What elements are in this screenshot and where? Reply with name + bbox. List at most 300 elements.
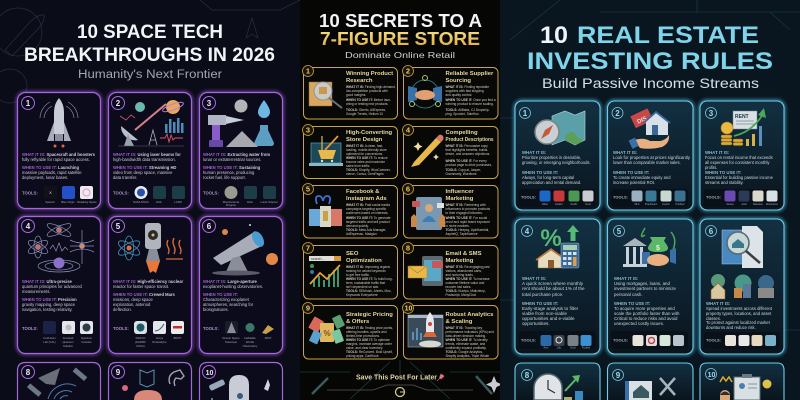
- card 2: lower than comparable market sales.: [613, 160, 681, 165]
- card 5: WHEN TO USE IT: Crewed Mars: [113, 292, 176, 297]
- card 3: Focus on rental income that exceeds: [705, 155, 773, 160]
- card 10: confidently expand profitably.: [446, 346, 487, 350]
- card 5: scale the portfolio faster than with: [614, 311, 680, 316]
- card 1: ching or testing new products.: [346, 102, 388, 106]
- icon: laser communications: [118, 100, 184, 146]
- card 3: WHAT IT IS: Extracting water from: [203, 152, 270, 157]
- card 3: rocket fuel, life support.: [203, 175, 246, 180]
- card 4: quantum principles for advanced: [22, 284, 83, 289]
- card 6: 6: [406, 184, 410, 194]
- logo badge: [327, 385, 473, 396]
- card 1: Prioritize properties in desirable,: [522, 155, 581, 160]
- card 3: all expenses for consistent monthly: [705, 160, 770, 165]
- card 2: TOOLS: AliBaba, CJ Dropship-: [446, 108, 490, 112]
- card 5: [108, 216, 192, 354]
- card 1: X: [49, 190, 52, 195]
- card 8: Postscript, ManyChat: [446, 293, 476, 297]
- card 4: Compelling: [446, 130, 478, 136]
- card 3: streams and stability.: [705, 180, 744, 185]
- card 9: [608, 363, 693, 400]
- card 1: 1: [306, 66, 310, 76]
- title: 10 SECRETS TO A: [319, 11, 482, 31]
- card 3: TOOLS:: [203, 190, 219, 196]
- card 1: WHAT IT IS: Finding high-demand,: [346, 85, 396, 89]
- card 3: Baselane: [753, 204, 764, 206]
- card 6: Influencer: [446, 189, 474, 195]
- card 8: 8: [525, 371, 530, 380]
- card 3: profits.: [705, 165, 717, 170]
- card 8: [18, 362, 100, 400]
- icon: tenant screening clipboard: [720, 374, 772, 400]
- card 4: opportunities and e-viable: [522, 316, 575, 321]
- card 6: WHAT IT IS: Large-aperture: [203, 279, 257, 284]
- card 8: 8: [406, 244, 410, 252]
- card 6: [200, 216, 282, 354]
- icon: due diligence and diversification: [711, 226, 774, 299]
- card 1: massive payloads, rapid satellite: [22, 170, 82, 175]
- card 4: desire, and answers objections.: [446, 152, 490, 156]
- card 4: TOOLS: Copy.ai, Jasper,: [446, 168, 481, 172]
- card 2: TOOLS:: [113, 190, 129, 196]
- card 2: Auction: [662, 203, 671, 206]
- card 7: Keywords Everywhere: [346, 293, 378, 297]
- icon: discounted house in hand: DIS: [636, 116, 648, 126]
- card 1: WHEN TO USE IT:: [522, 170, 559, 175]
- card 2: WHEN TO USE IT:: [613, 170, 650, 175]
- card 5: Using mortgages, loans, and: [614, 281, 670, 286]
- card 3: ESA: [247, 200, 253, 204]
- icon: one percent rule: %: [540, 225, 562, 252]
- card 6: downturns and reduce risk.: [706, 325, 756, 330]
- card 2: ping, Spocket, SaleHoo: [446, 112, 479, 116]
- card 1: Winning Product: [346, 71, 393, 77]
- card 4: Uniwave: [81, 340, 92, 344]
- card 4: Ainstead: [63, 336, 74, 340]
- card 2: suppliers with fast shipping: [446, 89, 484, 93]
- card 4: WHAT IT IS: Persuasive copy: [446, 144, 488, 148]
- card 1: [18, 92, 100, 208]
- card 3: WHEN TO USE IT:: [705, 170, 742, 175]
- card 3: optimized for conversions.: [346, 152, 383, 156]
- card 2: winning product to ensure scaling.: [446, 102, 494, 106]
- card 5: 5: [617, 227, 622, 236]
- title: REAL ESTATE: [577, 22, 759, 49]
- card 5: deflection.: [113, 307, 132, 312]
- card 5: campaigns targeting specific: [346, 207, 387, 211]
- card 4: Pockets: [582, 346, 591, 350]
- card 4: total purchase price.: [522, 292, 563, 297]
- icon: space capsule: [208, 375, 270, 400]
- card 1: Zillow: [542, 204, 548, 206]
- card 10: Robust Analytics: [446, 312, 494, 318]
- card 4: navigation, testing relativity.: [22, 307, 73, 312]
- card 4: Quantum: [81, 336, 93, 340]
- card 4: Early-stage analysis to filter: [522, 306, 579, 311]
- card 2: Reliable Supplier: [446, 71, 494, 77]
- card 4: that highlights benefits, builds: [446, 148, 488, 152]
- card 10: performance indicators (KPIs) and: [446, 330, 494, 334]
- card 3: merce, Canva, GemPages: [346, 172, 384, 176]
- card 3: 3: [306, 126, 310, 134]
- card 6: 6: [709, 227, 714, 236]
- card 5: unexpected costly issues.: [614, 321, 664, 326]
- card 6: Roman Space: [222, 336, 240, 340]
- card 1: WHEN TO USE IT: Before laun-: [346, 98, 391, 102]
- card 9: pricing apps, CartHook: [346, 354, 379, 358]
- card 5: WHEN TO USE IT:: [614, 301, 651, 306]
- card 2: PropStream: [645, 203, 657, 206]
- card 1: Google Trends, Helium 10: [346, 112, 383, 116]
- card 3: 3: [207, 99, 212, 108]
- card 9: value, and clear inventory.: [346, 346, 383, 350]
- card 3: 3: [709, 109, 714, 118]
- title: 7-FIGURE STORE: [320, 29, 480, 49]
- card 1: [302, 66, 398, 119]
- icon: supplier handshake: [408, 76, 442, 108]
- card 6: [402, 184, 498, 238]
- card 1: WHEN TO USE IT: Launching: [22, 165, 79, 170]
- card 2: [608, 101, 693, 210]
- card 5: Rocketdyne: [152, 340, 167, 344]
- card 5: reactor for faster space transit.: [113, 284, 169, 289]
- card 9: Strategic Pricing: [346, 312, 393, 318]
- card 6: JWST: [264, 336, 272, 340]
- card 7: WHAT IT IS: Improving organic: [346, 265, 391, 269]
- title: [24, 21, 275, 66]
- card 1: deployment, lunar bases.: [22, 175, 68, 180]
- card 6: proof and rapid brand exposure: [446, 220, 490, 224]
- card 6: AspireIQ, Tapinfluence: [446, 232, 478, 236]
- card 6: Characterizing exoplanet: [203, 297, 250, 302]
- card 4: WHEN TO USE IT:: [522, 301, 559, 306]
- card 9: offering bundles, upsells and: [346, 330, 387, 334]
- save this post callout: Save This Post For Later: [356, 372, 437, 382]
- card 3: loading, mobile-friendly store: [346, 148, 387, 152]
- card 1: 1: [523, 109, 528, 118]
- card 6: TOOLS:: [706, 338, 721, 342]
- card 8: recover lost sales.: [446, 285, 471, 289]
- card 3: WHEN TO USE IT: Sustaining: [203, 165, 261, 170]
- card 2: WHAT IT IS: Using laser beams for: [113, 152, 181, 157]
- card 10: WHEN TO USE IT: To identify: [446, 338, 488, 342]
- card 1: WHAT IT IS:: [522, 150, 547, 155]
- card 6: Worlds: [246, 340, 255, 344]
- card 2: MLS: [635, 204, 640, 206]
- card 2: Look for properties at prices significantly: [613, 155, 691, 160]
- card 5: NASA): [136, 344, 145, 348]
- card 3: WHAT IT IS: A clean, fast-: [346, 144, 383, 148]
- card 9: WHEN TO USE IT: To optimize: [346, 338, 390, 342]
- card 5: Instagram Ads: [346, 196, 387, 202]
- card 8: WHEN TO USE IT: To increase: [446, 277, 490, 281]
- card 4: WHEN TO USE IT: Precision: [22, 297, 77, 302]
- card 5: investment partners to minimize: [614, 286, 677, 291]
- card 3: Rentometer: [766, 203, 778, 206]
- icon: SEO chart: search...: [311, 257, 324, 261]
- icon: lunar drill and water: [208, 100, 274, 147]
- icon: rocket: [40, 98, 78, 148]
- subtitle: Humanity's Next Frontier: [78, 69, 222, 81]
- card 3: Moon/Artemis: [223, 200, 240, 204]
- panel: space tech: [0, 0, 300, 400]
- card 1: TOOLS:: [22, 190, 38, 196]
- card 6: Telescope: [225, 340, 238, 344]
- card 3: Essential for building passive income: [705, 175, 774, 180]
- card 2: [402, 66, 498, 119]
- card 5: TOOLS:: [113, 326, 129, 331]
- card 2: LCRD: [174, 200, 182, 204]
- card 4: viable from non-viable: [522, 311, 567, 316]
- card 9: & Offers: [346, 319, 370, 325]
- card 4: [18, 216, 100, 354]
- card 4: product page to drive purchases.: [446, 163, 492, 167]
- card 2: video from deep space, massive: [113, 170, 173, 175]
- icon: product research: [309, 82, 342, 108]
- card 6: property types, locations, and asset: [706, 311, 772, 316]
- card 2: 2: [406, 66, 410, 76]
- card 4: Lab (CAL): [43, 340, 56, 344]
- card 2: WHEN TO USE IT: Streaming HD: [113, 165, 176, 170]
- card 3: TOOLS:: [706, 194, 721, 200]
- card 6: 6: [207, 222, 212, 231]
- icon: analytics rocket: [408, 312, 443, 348]
- card 1: WHAT IT IS: Spacecraft and boosters: [22, 152, 96, 157]
- card 6: influencers to promote products: [446, 207, 491, 211]
- card 1: Redfin: [571, 204, 578, 206]
- card 5: (DARPA/: [135, 340, 146, 344]
- card 4: rent should be about 1% of the: [522, 286, 585, 291]
- card 3: WHEN TO USE IT: To reduce: [346, 156, 388, 160]
- card 10: Shopify Analytics, Triple Whale: [446, 354, 489, 358]
- card 2: WHEN TO USE IT: Once you find a: [446, 98, 496, 102]
- card 1: appreciation and rental demand.: [522, 180, 581, 185]
- title: 10: [540, 22, 568, 49]
- icon: satellites and antenna: [27, 368, 87, 399]
- card 9: WHAT IT IS: Testing price points,: [346, 326, 393, 330]
- card 5: Ansys: [156, 336, 164, 340]
- card 5: AdEspresso, Madgicx: [346, 232, 377, 236]
- card 9: margins, increase average order: [346, 342, 393, 346]
- card 6: Observatory: [243, 344, 258, 348]
- card 4: WHAT IT IS: Ultra-precise: [22, 279, 73, 284]
- card 9: [108, 362, 192, 400]
- card 10: WHAT IT IS: Tracking key: [446, 326, 483, 330]
- card 5: WHAT IT IS: Paid social media: [346, 203, 390, 207]
- card 5: [302, 184, 398, 238]
- card 7: WHEN TO USE IT: To build long-: [346, 277, 393, 281]
- card 3: TOOLS: Shopify, WooCommer-: [346, 168, 391, 172]
- card 5: missions, deep space: [113, 297, 154, 302]
- card 8: Email & SMS: [446, 251, 482, 257]
- card 8: and nurturing leads.: [446, 273, 474, 277]
- card 9: 9: [306, 304, 310, 312]
- card 3: bounce rates and maximize: [346, 160, 385, 164]
- card 5: WHEN TO USE IT: To generate: [346, 216, 391, 220]
- subtitle: Dominate Online Retail: [345, 50, 455, 60]
- card 1: low-competition products with: [346, 89, 388, 93]
- card 4: A quick screen where monthly: [522, 281, 584, 286]
- card 5: WHAT IT IS: High-efficiency nuclear: [113, 279, 183, 284]
- card 3: High-Converting: [346, 130, 393, 136]
- card 8: [515, 363, 600, 400]
- card 2: HubSpot: [676, 203, 685, 206]
- card 6: Marketing: [446, 196, 474, 202]
- title: 10 SPACE TECH: [77, 21, 223, 43]
- card 8: 8: [26, 368, 31, 377]
- icon: pencil: [411, 135, 444, 167]
- card 2: To create immediate equity and: [613, 175, 671, 180]
- card 3: Avail: [742, 203, 747, 206]
- card 6: WHEN TO USE IT:: [203, 292, 238, 297]
- panel: real estate: [500, 0, 800, 400]
- card 4: 4: [26, 222, 31, 231]
- card 7: isn't dependent on ads.: [346, 285, 379, 289]
- subtitle: Build Passive Income Streams: [542, 75, 759, 91]
- card 4: TOOLS:: [521, 338, 536, 342]
- card 5: BWXT: [174, 336, 182, 340]
- background rocket outline: [0, 0, 300, 103]
- card 5: targeted traffic and sell product: [346, 220, 390, 224]
- card 8: TOOLS: Klaviyo, Mailchimp,: [446, 289, 486, 293]
- card 4: Cold Atom: [43, 336, 56, 340]
- card 5: TOOLS:: [613, 338, 628, 342]
- card 1: 1: [26, 99, 31, 108]
- card 1: good margins.: [346, 93, 366, 97]
- icon: property manual and tools: [625, 378, 675, 400]
- card 8: [402, 242, 498, 299]
- card 4: Calc: [557, 348, 562, 350]
- card 1: Realtor: [555, 203, 563, 206]
- card 2: TOOLS:: [613, 194, 628, 200]
- card 1: TOOLS: Oberlo, AliExpress,: [346, 108, 386, 112]
- card 9: TOOLS: ReConvert, Bold Upsell,: [346, 350, 393, 354]
- card 2: [108, 92, 192, 208]
- card 3: WHAT IT IS:: [705, 150, 730, 155]
- title: [527, 22, 773, 75]
- icon: email and phone: [408, 256, 443, 286]
- icon: nuclear rocket: [116, 223, 183, 273]
- card 5: 5: [306, 184, 310, 194]
- card 4: Rent: [544, 346, 549, 350]
- card 10: 10: [405, 306, 412, 312]
- card 9: [302, 302, 398, 359]
- card 1: SpaceX: [45, 200, 55, 204]
- card 4: [515, 219, 600, 354]
- card 5: exploration, asteroid: [113, 302, 151, 307]
- card 10: & Scaling: [446, 319, 473, 325]
- card 8: customer lifetime value and: [446, 281, 485, 285]
- card 8: Marketing: [446, 258, 474, 264]
- panel: ecommerce secrets: [300, 0, 502, 400]
- card 10: 10: [708, 372, 715, 379]
- card 5: TOOLS: Meta Ads Manager,: [346, 228, 387, 232]
- title: INVESTING RULES: [527, 48, 773, 75]
- card 1: Always, for long-term capital: [522, 175, 574, 180]
- card 7: [302, 242, 398, 299]
- icon: clock and growth: [534, 374, 583, 400]
- card 6: Spread investments across different: [706, 306, 773, 311]
- icon: influencer: [411, 197, 445, 230]
- icon: social ads: [309, 196, 342, 227]
- card 6: WHAT IT IS: Partnering with: [446, 203, 486, 207]
- card 8: visitors, abandoned carts,: [446, 269, 482, 273]
- card 10: 10: [206, 370, 213, 377]
- card 1: TOOLS:: [521, 194, 536, 200]
- card 4: WHEN TO USE IT: For every: [446, 159, 487, 163]
- card 2: Sourcing: [446, 78, 471, 84]
- card 6: TOOLS:: [203, 326, 219, 331]
- card 3: [200, 92, 282, 208]
- card 2: ESA: [156, 200, 162, 204]
- title: BREAKTHROUGHS IN 2026: [24, 44, 275, 66]
- card 7: ranking for valued keywords: [346, 269, 386, 273]
- icon: space telescope: [212, 224, 278, 276]
- card 2: WHAT IT IS: Finding reputable: [446, 85, 489, 89]
- card 5: [608, 219, 693, 354]
- card 4: Product Descriptions: [446, 137, 494, 143]
- card 3: [700, 101, 784, 210]
- card 3: [302, 124, 398, 178]
- card 1: Relativity Space: [77, 200, 97, 204]
- card 10: trends, eliminate waste, and: [446, 342, 485, 346]
- card 3: Lunar Outpost: [260, 200, 278, 204]
- card 5: audiences based on interests.: [346, 211, 388, 215]
- card 10: [700, 363, 784, 400]
- card 4: WHAT IT IS:: [522, 276, 547, 281]
- card 5: To acquire more properties and: [614, 306, 675, 311]
- icon: sparkle: [486, 376, 502, 393]
- card 5: Facebook &: [346, 189, 380, 195]
- icon: AI brain and robotic arm: [122, 370, 184, 400]
- card 5: demand quickly.: [346, 224, 369, 228]
- icon: leverage bank and handshake: $: [656, 245, 660, 252]
- card 3: Store Design: [346, 137, 383, 143]
- card 2: NASA DSOC: [133, 200, 149, 204]
- card 1: fully reflyable for rapid space access.: [22, 157, 90, 162]
- icon: quantum sensing: [26, 221, 94, 272]
- card 4: gravity mapping, deep space: [22, 302, 76, 307]
- card 7: TOOLS: SEMrush, Ahrefs, Moz,: [346, 289, 392, 293]
- card 3: human presence, producing: [203, 170, 255, 175]
- card 1: [515, 101, 600, 210]
- card 2: WHAT IT IS:: [613, 150, 638, 155]
- card 2: data transfer.: [113, 175, 137, 180]
- card 6: biosignatures.: [203, 307, 229, 312]
- card 4: TOOLS:: [22, 326, 38, 331]
- card 6: TOOLS: Heepsy, Upinfluential,: [446, 228, 489, 232]
- card 4: [402, 124, 498, 178]
- card 7: 7: [306, 244, 310, 252]
- card 5: personal cash.: [614, 292, 643, 297]
- card 10: [200, 362, 282, 400]
- card 9: 9: [616, 371, 621, 380]
- card 2: and quality control.: [446, 93, 472, 97]
- card 1: Blue Origin: [61, 200, 75, 204]
- card 3: Stessa: [726, 203, 734, 206]
- card 6: Habitable: [244, 336, 256, 340]
- card 9: 9: [116, 368, 121, 377]
- card 4: Initiative: [63, 344, 73, 348]
- card 6: WHEN TO USE IT: For social: [446, 216, 487, 220]
- card 10: TOOLS: Google Analytics,: [446, 350, 483, 354]
- card 6: atmospheres, searching for: [203, 302, 254, 307]
- card 3: lunar or extraterrestrial sources.: [203, 157, 261, 162]
- background circuit lines: [500, 0, 800, 330]
- card 1: Research: [346, 78, 373, 84]
- card 10: [402, 302, 498, 359]
- card 3: sales from traffic.: [346, 164, 370, 168]
- card 4: Quantum: [62, 340, 74, 344]
